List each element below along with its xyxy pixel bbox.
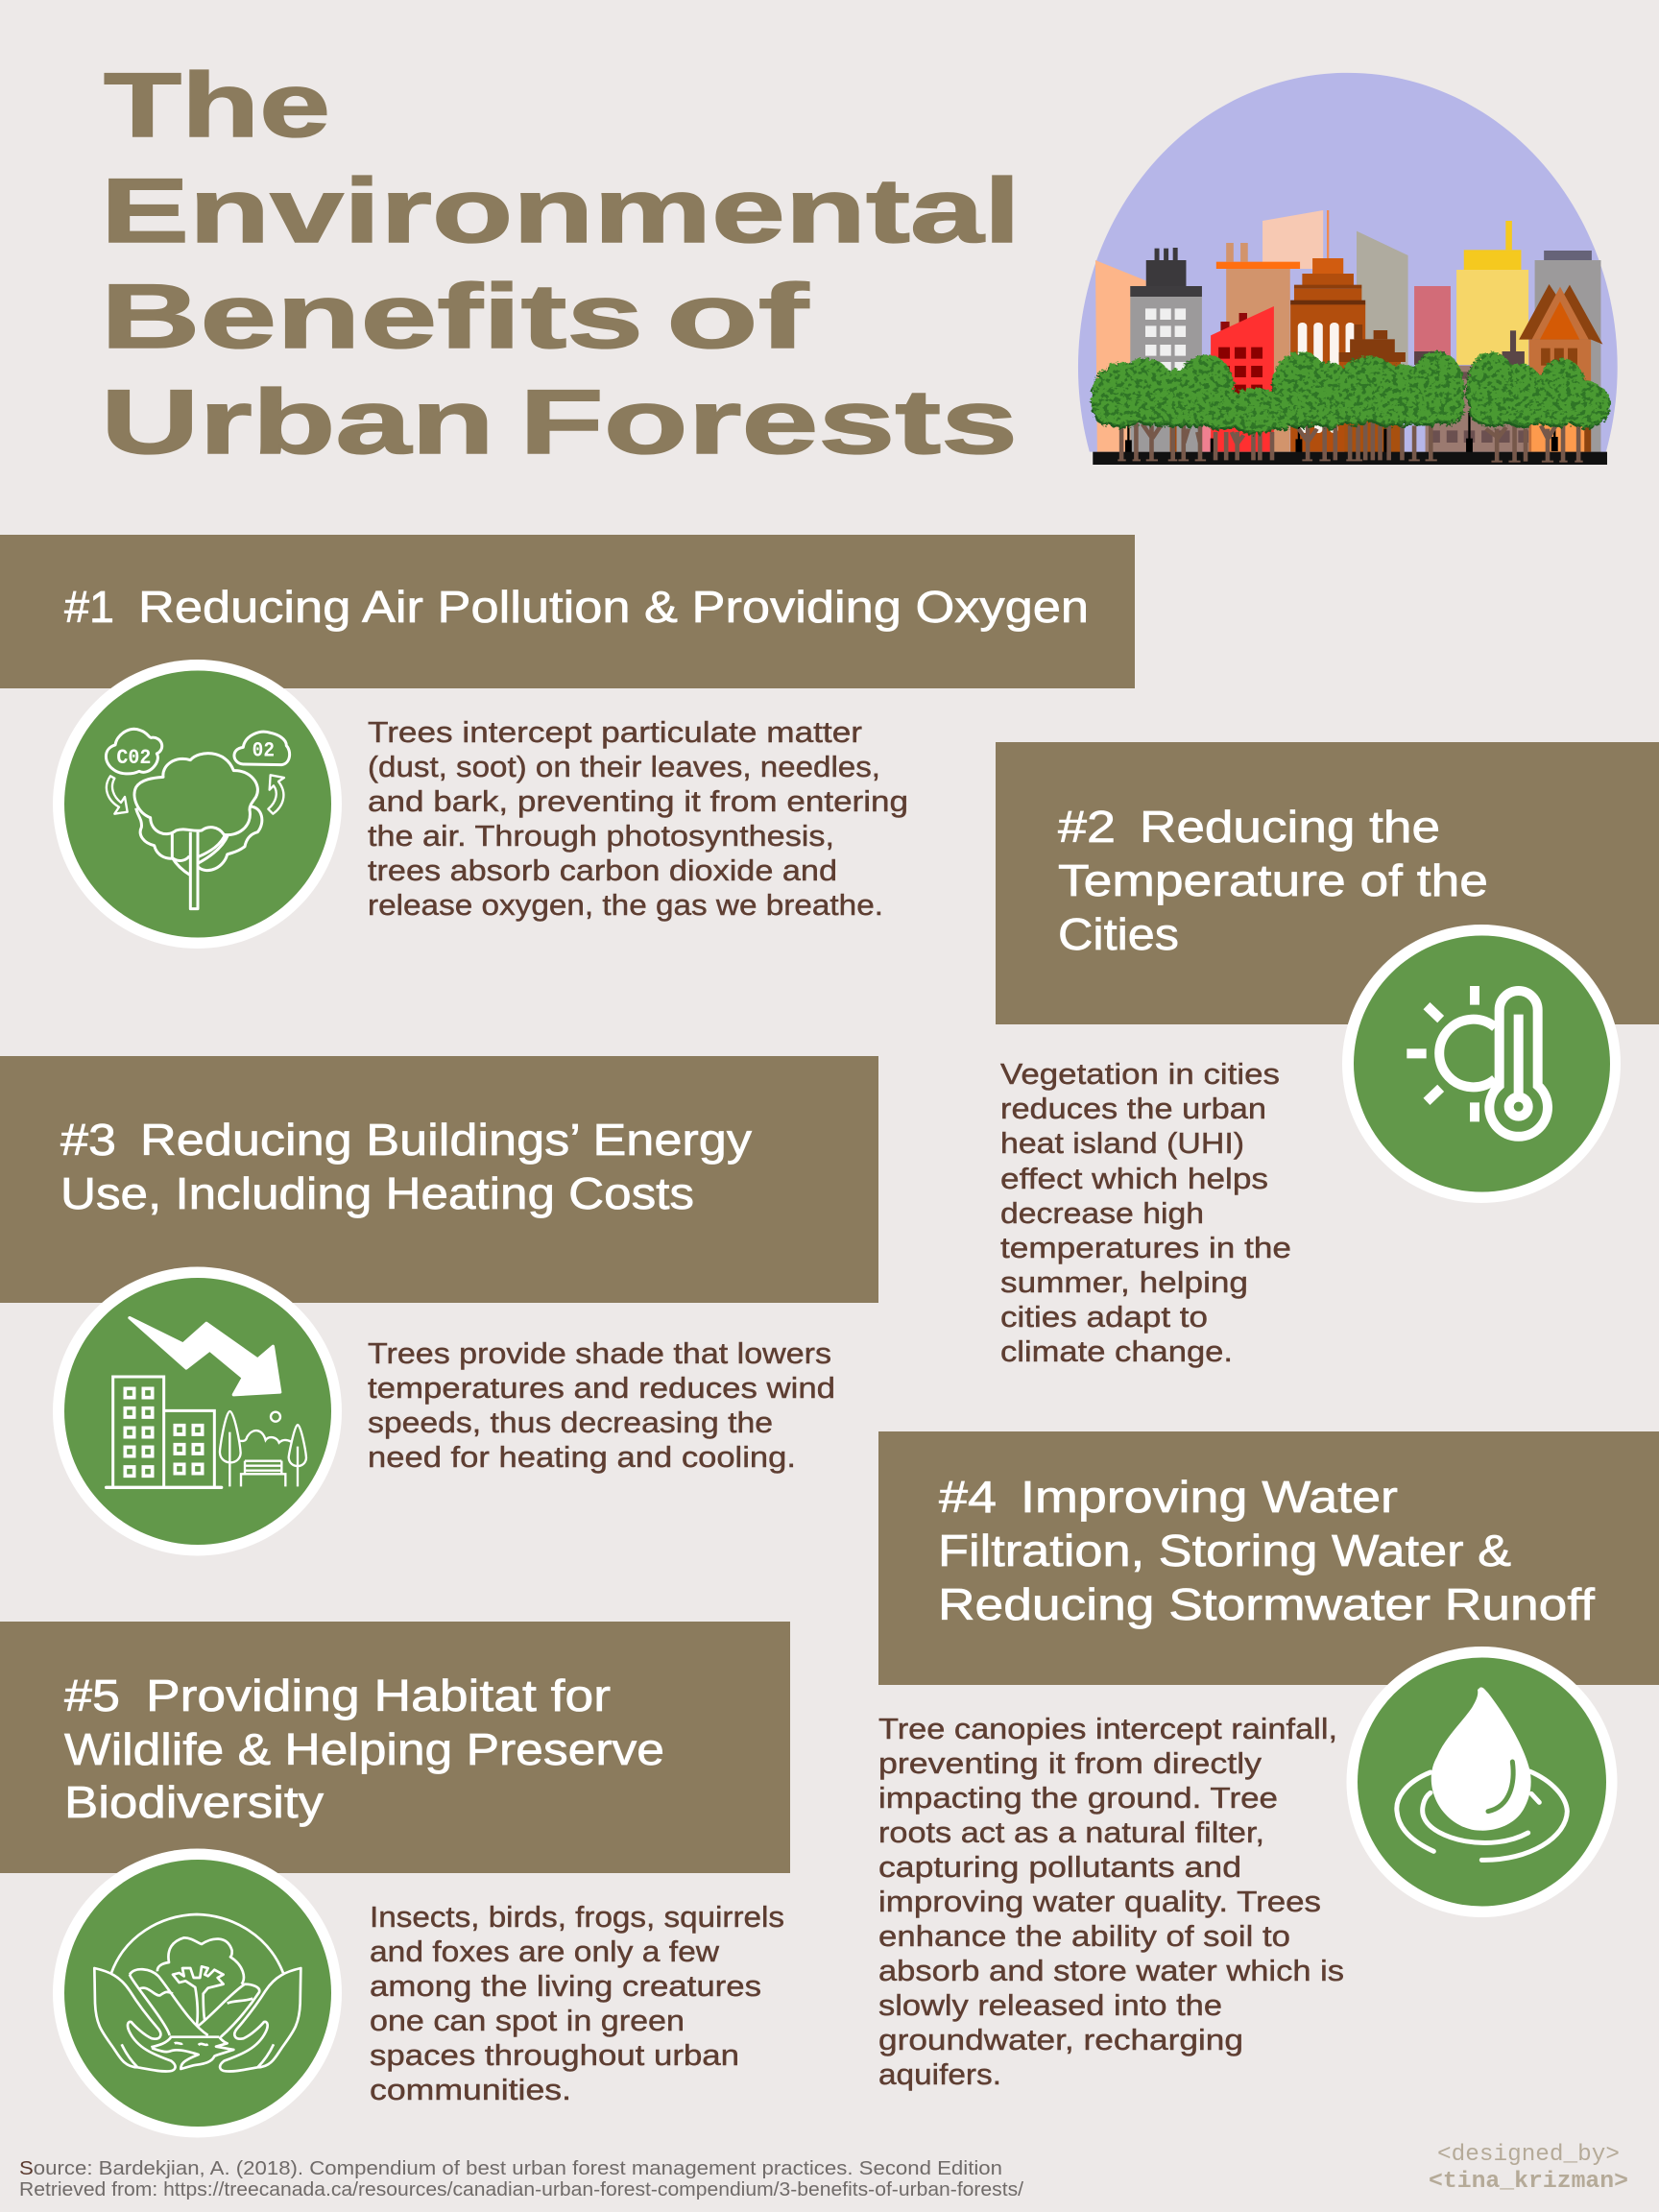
heading 5: Providing Habitat for [146, 1671, 611, 1720]
body text 5: and foxes are only a few [370, 1935, 720, 1968]
body text 2: heat island (UHI) [1000, 1126, 1244, 1160]
panel 4: water filtration [878, 1431, 1659, 2091]
heading 2: Temperature of the [1058, 855, 1488, 905]
panel 3: buildings energy use [0, 1056, 878, 1555]
badge: hands holding nature [53, 1849, 342, 2137]
body text 1 [368, 715, 908, 922]
body text 1: (dust, soot) on their leaves, needles, [368, 750, 880, 783]
tree trunks [1121, 422, 1578, 462]
badge: tree exchanging CO2 and O2: 02 [252, 739, 275, 763]
body text 3: need for heating and cooling. [368, 1440, 796, 1474]
title: Urban [101, 372, 494, 473]
heading 3: Reducing Buildings’ Energy [140, 1115, 752, 1165]
badge: water drop and ripples [1346, 1647, 1617, 1917]
body text 5: communities. [370, 2073, 571, 2106]
body text 1: trees absorb carbon dioxide and [368, 854, 837, 887]
body text 4: roots act as a natural filter, [878, 1815, 1264, 1849]
body text 1: and bark, preventing it from entering [368, 784, 908, 818]
body text 1: the air. Through photosynthesis, [368, 819, 834, 853]
street lamps [1125, 413, 1558, 454]
title: Forests [519, 372, 1018, 473]
badge: tree exchanging CO2 and O2 [53, 660, 342, 949]
heading 5: Biodiversity [64, 1777, 324, 1827]
source citation [19, 2157, 1023, 2200]
body text 4: capturing pollutants and [878, 1850, 1241, 1884]
ground strip [1093, 452, 1607, 465]
heading 4: Reducing Stormwater Runoff [938, 1579, 1595, 1629]
heading 5 [64, 1671, 664, 1827]
body text 4: enhance the ability of soil to [878, 1919, 1290, 1953]
badge: tree exchanging CO2 and O2: C02 [116, 746, 151, 770]
title: The [104, 55, 330, 156]
body text 4: slowly released into the [878, 1988, 1222, 2022]
banner 1 [0, 535, 1135, 688]
body text 5: among the living creatures [370, 1969, 761, 2003]
heading 4: #4 [939, 1472, 997, 1522]
panel 5: habitat and biodiversity [0, 1622, 790, 2137]
body text 2: reduces the urban [1000, 1092, 1266, 1125]
heading 3: Use, Including Heating Costs [60, 1168, 694, 1218]
body text 2 [1000, 1057, 1291, 1368]
body text 2: temperatures in the [1000, 1231, 1291, 1264]
tree canopies [1092, 351, 1610, 435]
heading 2: Reducing the [1140, 802, 1440, 852]
heading 2: Cities [1058, 909, 1179, 959]
source citation: Source: Bardekjian, A. (2018). Compendium of best urban forest management practices. Second Edition [19, 2157, 1002, 2179]
body text 2: Vegetation in cities [1000, 1057, 1280, 1091]
panel 1: air pollution and oxygen [0, 535, 1135, 949]
heading 5: #5 [64, 1671, 120, 1720]
body text 2: cities adapt to [1000, 1300, 1208, 1334]
body text 1: release oxygen, the gas we breathe. [368, 888, 883, 922]
body text 2: climate change. [1000, 1334, 1233, 1368]
body text 3: Trees provide shade that lowers [368, 1336, 831, 1370]
body text 4: groundwater, recharging [878, 2023, 1243, 2056]
source citation: Retrieved from: https://treecanada.ca/resources/canadian-urban-forest-compendium/3-benefits-of-urban-forests/ [19, 2178, 1023, 2200]
body text 5: Insects, birds, frogs, squirrels [370, 1900, 784, 1934]
body text 4: improving water quality. Trees [878, 1885, 1321, 1918]
body text 4 [878, 1712, 1344, 2091]
body text 3: speeds, thus decreasing the [368, 1406, 773, 1439]
heading 5: Wildlife & Helping Preserve [64, 1724, 664, 1774]
body text 2: decrease high [1000, 1196, 1204, 1230]
banner 2 [996, 742, 1659, 1024]
heading 1: #1 [64, 582, 114, 632]
body text 4: preventing it from directly [878, 1746, 1262, 1780]
title: of [666, 266, 809, 368]
banner 5 [0, 1622, 790, 1873]
title: Environmental [101, 160, 1021, 262]
body text 4: aquifers. [878, 2057, 1001, 2091]
body text 4: Tree canopies intercept rainfall, [878, 1712, 1337, 1745]
body text 1: Trees intercept particulate matter [368, 715, 862, 749]
title [101, 55, 1021, 473]
body text 3: temperatures and reduces wind [368, 1371, 835, 1405]
title: Benefits [101, 266, 643, 368]
heading 4 [938, 1472, 1595, 1629]
banner 3 [0, 1056, 878, 1303]
heading 3 [60, 1115, 752, 1218]
body text 2: summer, helping [1000, 1265, 1248, 1299]
heading 2: #2 [1058, 802, 1116, 852]
heading 4: Filtration, Storing Water & [938, 1526, 1511, 1575]
body text 5 [370, 1900, 784, 2106]
badge: arrow down and buildings with park [53, 1267, 342, 1555]
designer credit [1429, 2142, 1628, 2195]
body text 2: effect which helps [1000, 1162, 1268, 1195]
heading 2 [1058, 802, 1488, 959]
badge: sun and thermometer [1342, 925, 1621, 1203]
body text 4: absorb and store water which is [878, 1954, 1344, 1987]
banner 4 [878, 1431, 1659, 1685]
designer credit: <tina_krizman> [1429, 2169, 1628, 2195]
heading 3: #3 [60, 1115, 116, 1165]
heading 4: Improving Water [1021, 1472, 1398, 1522]
body text 5: spaces throughout urban [370, 2038, 739, 2072]
designer credit: <designed_by> [1437, 2142, 1620, 2168]
city skyline illustration [1078, 73, 1618, 465]
panel 2: temperature of the cities [996, 742, 1659, 1368]
body text 5: one can spot in green [370, 2004, 685, 2037]
body text 4: impacting the ground. Tree [878, 1781, 1278, 1815]
body text 3 [368, 1336, 835, 1474]
heading 1: Reducing Air Pollution & Providing Oxygen [138, 582, 1089, 632]
